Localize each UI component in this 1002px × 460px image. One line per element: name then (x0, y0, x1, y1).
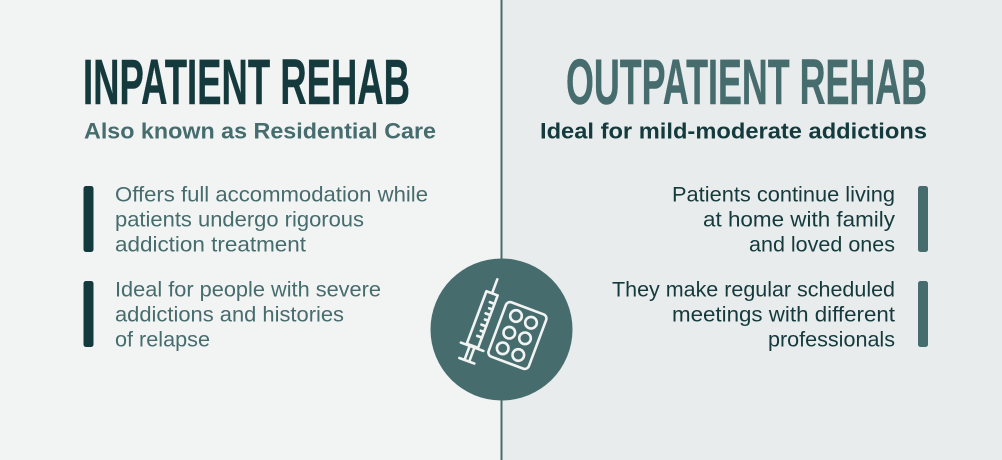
badge circle (430, 258, 572, 400)
text block: scheduled meetings: meetings with different (672, 304, 895, 327)
text block: scheduled meetings (612, 279, 895, 352)
text block: scheduled meetings: professionals (768, 329, 895, 352)
center divider line (500, 0, 502, 460)
bullet bar: accommodation (84, 186, 94, 252)
text block: living at home: and loved ones (749, 234, 895, 257)
icon: syringe and pill pack badge (430, 258, 572, 400)
text block: accommodation (115, 184, 428, 257)
text block: living at home: Patients continue living (672, 184, 895, 207)
text block: living at home: at home with family (703, 209, 896, 232)
text block: scheduled meetings: They make regular scheduled (612, 279, 895, 302)
icon: blister pill pack (487, 301, 548, 370)
text block: accommodation: Offers full accommodation while (115, 184, 428, 207)
panel: outpatient content (540, 46, 928, 352)
bullet bar: severe addictions (84, 281, 94, 347)
icon: syringe (456, 275, 509, 365)
text block: accommodation: addiction treatment (115, 234, 306, 257)
text block: severe addictions: of relapse (115, 329, 210, 352)
bullet bar: living at home (918, 186, 928, 252)
panel: inpatient content (83, 46, 436, 352)
text block: accommodation: patients undergo rigorous (115, 209, 364, 232)
subheading: residential care: Also known as Residential Care (84, 118, 436, 144)
panel: inpatient background (0, 0, 501, 460)
bullet bar: scheduled meetings (918, 281, 928, 347)
text block: severe addictions (115, 279, 381, 352)
panel: outpatient background (501, 0, 1002, 460)
text block: living at home (672, 184, 896, 257)
text block: severe addictions: addictions and histories (115, 304, 344, 327)
text block: severe addictions: Ideal for people with severe (115, 279, 381, 302)
subheading: mild-moderate addictions: Ideal for mild-moderate addictions (540, 118, 927, 144)
heading: inpatient rehab: INPATIENT REHAB (83, 46, 410, 118)
